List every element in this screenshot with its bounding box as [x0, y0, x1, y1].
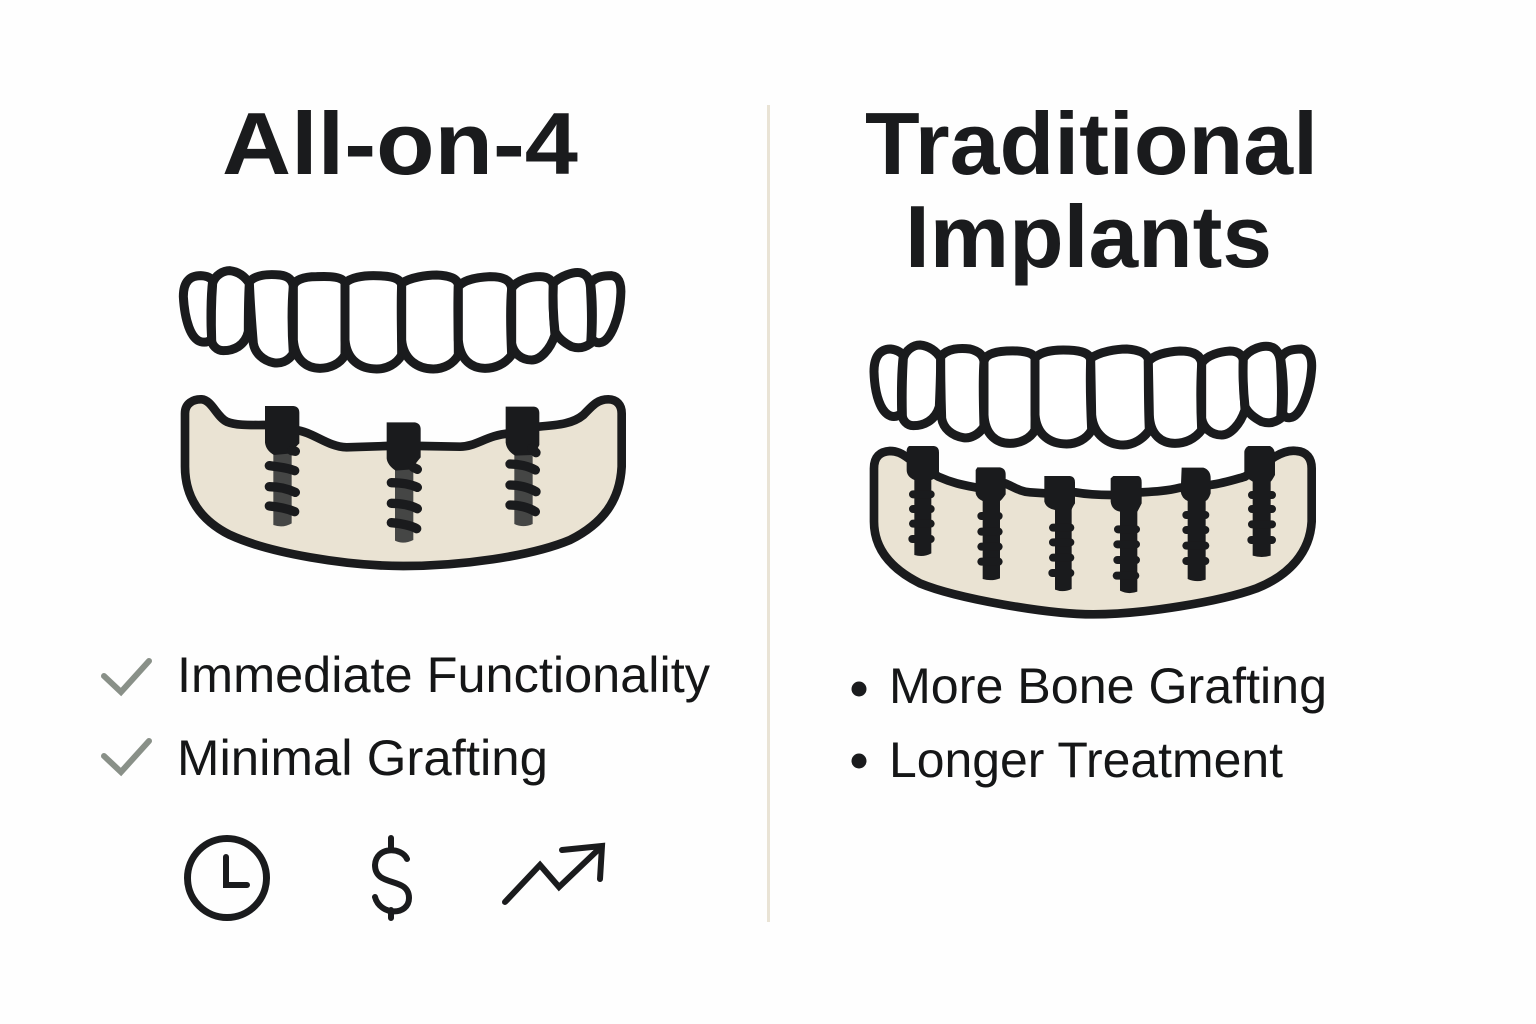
drawback: Longer Treatment: Longer Treatment — [889, 732, 1283, 788]
illustration: All-on-4 dental arch — [183, 271, 622, 566]
title: Traditional Implants — [865, 94, 1318, 286]
implant 1 — [907, 446, 939, 556]
drawback: More Bone Grafting: More Bone Grafting — [889, 658, 1327, 714]
implant 6 — [1244, 446, 1275, 557]
implant 5 — [1181, 468, 1211, 581]
panel: All-on-4 — [104, 94, 710, 918]
title: Traditional Implants: Traditional — [865, 94, 1318, 193]
jaw bone — [185, 399, 622, 566]
implant centre — [387, 422, 421, 543]
title: All-on-4: All-on-4 — [222, 94, 578, 193]
upper teeth row — [183, 271, 621, 369]
implant left — [265, 406, 299, 526]
bullet — [852, 754, 866, 768]
bullet — [852, 682, 866, 696]
illustration: traditional dental arch — [874, 345, 1312, 614]
title: Traditional Implants: Implants — [905, 187, 1272, 286]
icon: clock — [188, 838, 266, 918]
jaw bone — [874, 451, 1312, 614]
implant right — [506, 407, 539, 526]
implant 4 — [1111, 476, 1142, 593]
implant 3 — [1044, 476, 1075, 591]
implant 2 — [976, 467, 1006, 580]
icon: growth arrow — [505, 846, 602, 902]
panel: Traditional Implants — [852, 94, 1327, 788]
upper teeth row — [874, 345, 1312, 445]
icon: dollar sign — [375, 838, 409, 918]
icon: check mark — [104, 741, 149, 772]
icon: check mark — [104, 661, 149, 692]
benefit: Minimal Grafting: Minimal Grafting — [177, 730, 548, 786]
benefit: Immediate Functionality: Immediate Functionality — [177, 647, 710, 703]
